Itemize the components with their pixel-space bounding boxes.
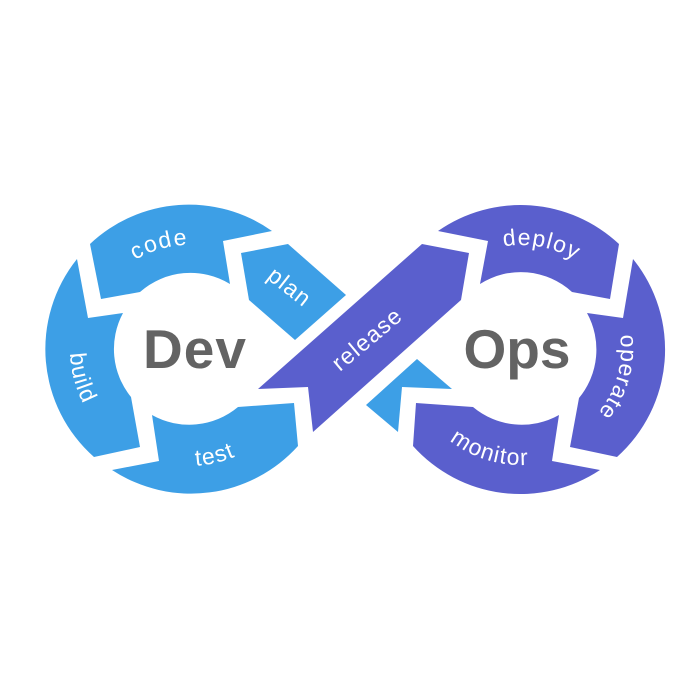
label: operate: operate: [600, 336, 634, 418]
segment: plan: [241, 244, 346, 340]
label: test: test: [194, 444, 235, 466]
segment: release: [258, 244, 469, 432]
segment: monitor: [413, 403, 600, 494]
label: build: build: [70, 353, 98, 402]
segment: operate: [570, 259, 666, 457]
label: release: release: [326, 302, 407, 376]
label: code: code: [132, 230, 186, 258]
heading: Ops: Ops: [464, 318, 570, 380]
arrow tail: blue crossover: [366, 359, 452, 432]
segment: test: [112, 403, 298, 494]
label: plan: plan: [263, 262, 317, 312]
segment: deploy: [438, 205, 619, 299]
segment: build: [45, 259, 140, 457]
label: deploy: deploy: [504, 228, 580, 260]
heading: Dev: Dev: [143, 318, 247, 380]
segment: code: [90, 204, 272, 299]
label: monitor: monitor: [450, 431, 528, 466]
